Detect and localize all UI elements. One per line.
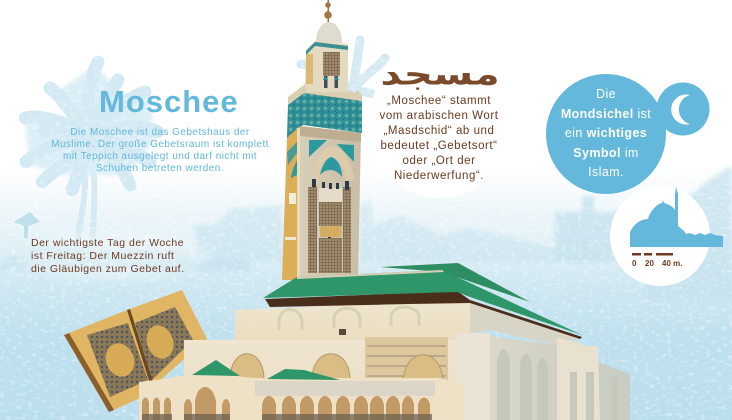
- scale bar: 20: [645, 259, 654, 268]
- dome: [316, 22, 342, 43]
- intro text: [51, 127, 269, 174]
- upper wall arches: [279, 307, 419, 330]
- small green roofs: [192, 360, 240, 376]
- eaves: [265, 291, 582, 339]
- main roof: [263, 270, 582, 335]
- etymology text: Niederwerfung“.: [394, 170, 484, 182]
- crescent info circle: Symbol im: [573, 146, 639, 160]
- arches on middle wall: [230, 354, 443, 384]
- intro text: Muslime. Der große Gebetsraum ist komplett: [51, 139, 269, 150]
- intro text: Schuhen betreten werden.: [96, 163, 224, 174]
- small palm mid left: [14, 212, 40, 238]
- teal arch panels: [309, 140, 354, 162]
- etymology text: [380, 95, 498, 182]
- middle wall: [184, 340, 464, 420]
- scale bar: [632, 253, 682, 268]
- arabic word: مسجد: [380, 56, 500, 92]
- crescent info circle: Islam.: [588, 165, 624, 179]
- palm tree behind tower: [300, 40, 390, 105]
- etymology text: „Masdschid“ ab und: [384, 125, 494, 137]
- etymology text: oder „Ort der: [402, 155, 475, 167]
- etymology text: bedeutet „Gebetsort“: [380, 140, 498, 152]
- friday text: die Gläubigen zum Gebet auf.: [31, 263, 185, 275]
- crescent info circle: Die: [596, 87, 616, 101]
- lower arcade: [142, 387, 430, 420]
- mosque building: [139, 263, 630, 420]
- scale bar: 0: [632, 259, 637, 268]
- friday text: Der wichtigste Tag der Woche: [31, 237, 184, 249]
- friday text: ist Freitag: Der Muezzin ruft: [31, 250, 174, 262]
- white patch behind text: [20, 232, 210, 280]
- ornament panels: [87, 323, 148, 397]
- intro text: Die Moschee ist das Gebetshaus der: [70, 127, 250, 138]
- white patch behind etymology: [370, 42, 510, 198]
- crescent info circle: Mondsichel ist: [561, 106, 651, 120]
- distant city silhouette: [0, 165, 732, 300]
- upper wall: [235, 300, 470, 345]
- lower front wall: [139, 376, 464, 420]
- back roof: [380, 263, 530, 302]
- etymology text: „Moschee“ stammt: [387, 95, 491, 107]
- lantern: [305, 41, 348, 92]
- mosque silhouette: [630, 187, 723, 247]
- palm tree left: [25, 62, 158, 245]
- tiled band: [287, 93, 362, 138]
- crescent info circle: ein wichtiges: [565, 126, 647, 140]
- crenellations: [288, 84, 362, 106]
- side wall: [470, 300, 582, 345]
- crescent circle: [657, 82, 710, 136]
- crescent info circle: [546, 74, 666, 194]
- minaret tower: [282, 0, 362, 280]
- friday text: [31, 237, 185, 275]
- finial: [324, 0, 332, 30]
- title: Moschee: [99, 84, 239, 119]
- far right wing: [598, 362, 630, 420]
- lattice panels: [308, 187, 317, 273]
- etymology text: vom arabischen Wort: [380, 110, 498, 122]
- scale bar: 40 m.: [662, 259, 682, 268]
- tower shaft: [298, 126, 361, 280]
- intro text: mit Teppich ausgelegt und darf nicht mit: [63, 151, 257, 162]
- quran book: [64, 290, 207, 412]
